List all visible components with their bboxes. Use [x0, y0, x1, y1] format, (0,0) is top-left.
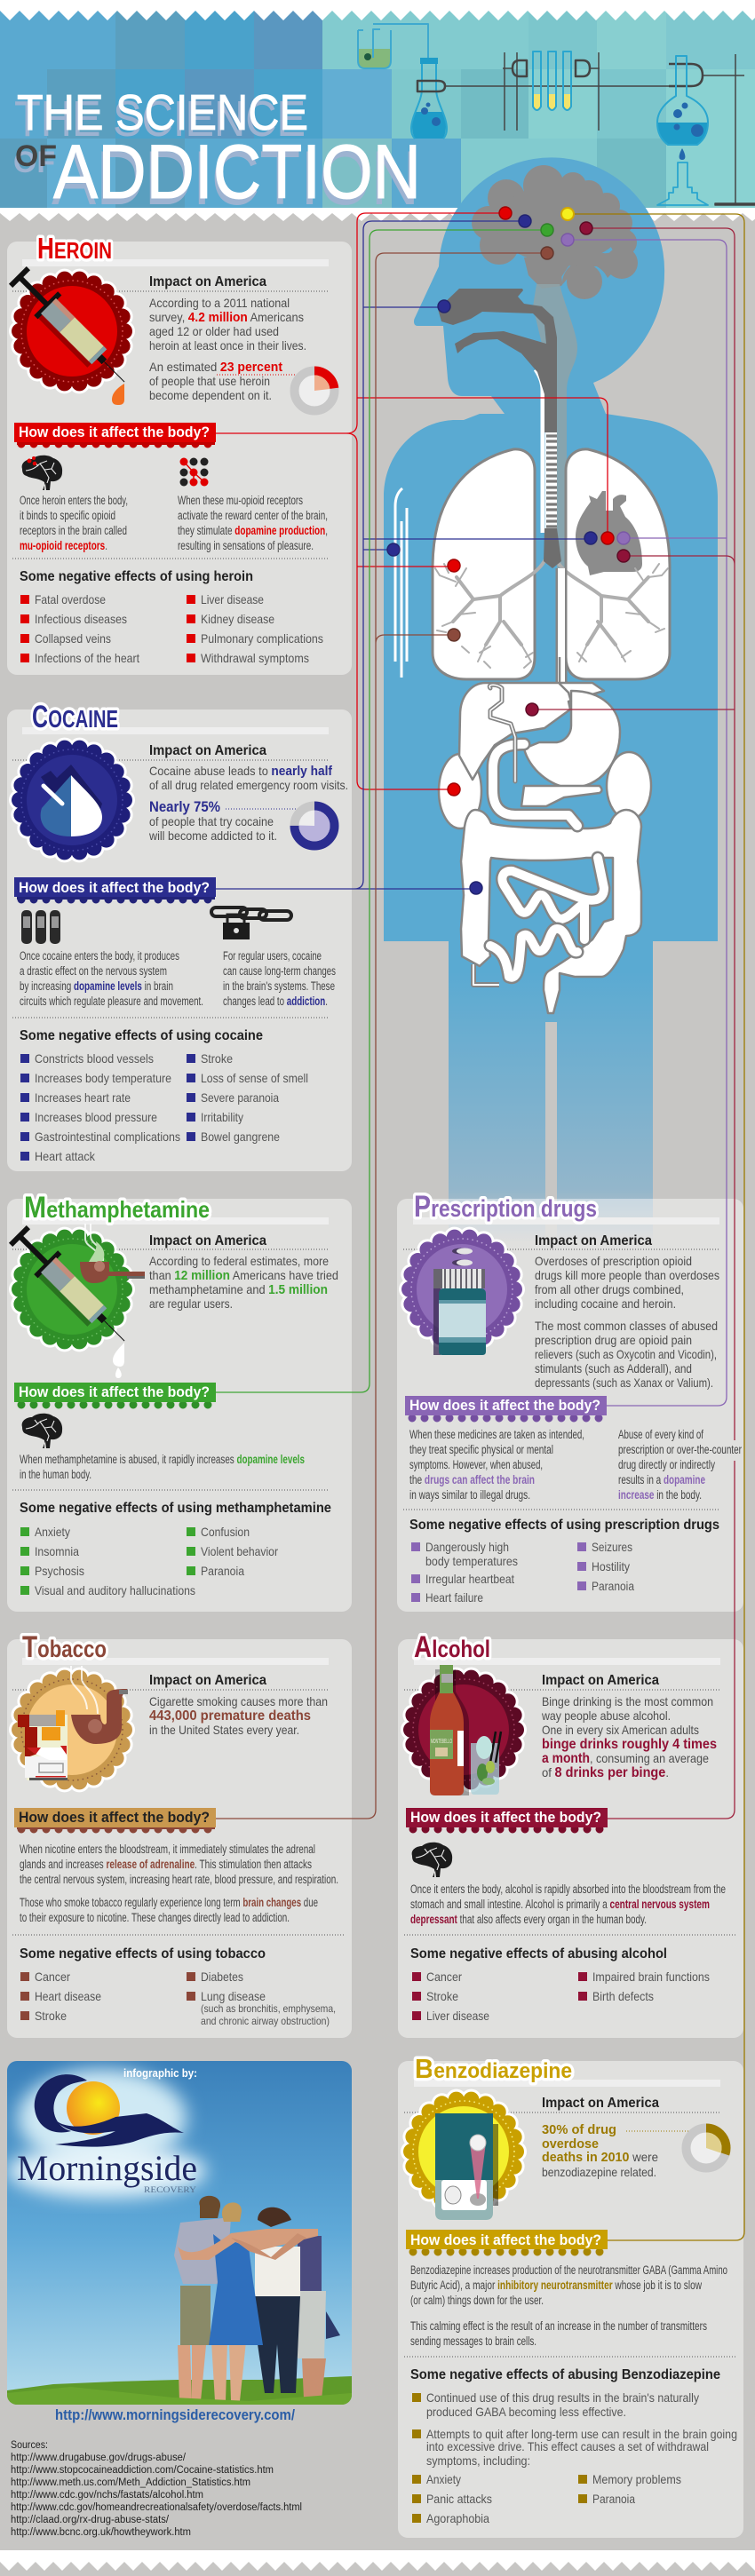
body explanation text: changes lead to addiction. — [223, 995, 328, 1008]
negative effects list: Heart disease — [35, 1989, 101, 2003]
impact text: One in every six American adults — [542, 1723, 699, 1737]
body explanation text: Abuse of every kind of — [618, 1428, 703, 1441]
impact text: heroin at least once in their lives. — [149, 338, 306, 353]
connector: benzodiazepine — [568, 214, 744, 2240]
icon: prescription badge — [409, 1236, 515, 1355]
tab: how does it affect the body: How does it affect the body? — [19, 424, 210, 440]
heading: impact on america: Impact on America — [149, 274, 266, 289]
icon: tobacco badge — [18, 1666, 128, 1783]
negative effects list: Visual and auditory hallucinations — [35, 1583, 195, 1597]
negative effects list — [20, 1028, 308, 1163]
negative effects list: Heart attack — [35, 1149, 96, 1163]
negative effects list: body temperatures — [425, 1554, 518, 1568]
body explanation text: increase in the body. — [618, 1488, 702, 1502]
body explanation text: When nicotine enters the bloodstream, it immediately stimulates the adrenal — [20, 1843, 315, 1856]
negative effects list: Some negative effects of abusing alcohol — [410, 1946, 667, 1962]
title: OF — [13, 146, 55, 179]
body explanation text: sending messages to brain cells. — [410, 2334, 536, 2348]
body explanation text: Butyric Acid), a major inhibitory neurotransmitter whose job it is to slow — [410, 2279, 702, 2292]
connector: heroin — [216, 213, 608, 789]
panel: tobacco — [7, 1630, 352, 2038]
body explanation text: the central nervous system, increasing heart rate, blood pressure, and respiration. — [20, 1873, 338, 1886]
body explanation text: depressant that also affects every organ in the human body. — [410, 1913, 647, 1926]
impact text: Binge drinking is the most common — [542, 1694, 713, 1708]
impact text: 443,000 premature deaths — [149, 1708, 311, 1724]
negative effects list: Birth defects — [592, 1989, 654, 2003]
impact text — [149, 1694, 328, 1737]
body explanation text — [410, 2263, 727, 2348]
impact text: The most common classes of abused — [535, 1319, 718, 1333]
impact text: will become addicted to it. — [148, 828, 277, 843]
heading: impact on america: Impact on America — [535, 1233, 652, 1248]
negative effects list: Withdrawal symptoms — [201, 651, 309, 665]
negative effects list: Stroke — [201, 1051, 233, 1066]
body explanation text: When methamphetamine is abused, it rapidly increases dopamine levels — [20, 1453, 305, 1466]
body silhouette — [384, 157, 718, 1243]
negative effects list: Severe paranoia — [201, 1090, 279, 1105]
heading: impact on america: Impact on America — [149, 743, 266, 758]
panel: cocaine — [7, 700, 352, 1171]
icon: flask left — [411, 58, 447, 139]
body marker dots — [387, 207, 630, 894]
impact text: than 12 million Americans have tried — [149, 1268, 338, 1283]
abdominal organs — [439, 657, 651, 1013]
lab equipment illustration — [358, 24, 755, 205]
negative effects list: Some negative effects of using prescription drugs — [409, 1518, 719, 1533]
bronchi — [435, 543, 668, 668]
body explanation text — [20, 1453, 305, 1481]
icon: brain with receptors — [22, 456, 62, 490]
impact text — [149, 296, 306, 402]
human body diagram — [384, 157, 718, 1243]
lung airway join — [544, 528, 561, 568]
negative effects list: Infectious diseases — [35, 612, 127, 626]
negative effects list: Some negative effects of using tobacco — [20, 1946, 266, 1962]
sources list: http://www.cdc.gov/nchs/fastats/alcohol.htm — [11, 2490, 203, 2501]
impact text — [148, 764, 348, 843]
impact text: benzodiazepine related. — [542, 2165, 656, 2179]
title: THE SCIENCE — [14, 91, 306, 147]
negative effects list: Some negative effects of using methamphetamine — [20, 1501, 331, 1516]
impact text: relievers (such as Oxycotin and Vicodin), — [535, 1347, 717, 1361]
negative effects list: Seizures — [592, 1540, 632, 1554]
impact text: According to a 2011 national — [149, 296, 290, 310]
heading: impact on america: Impact on America — [149, 1233, 266, 1248]
negative effects list: Gastrointestinal complications — [35, 1129, 180, 1144]
negative effects list: Diabetes — [201, 1970, 243, 1984]
negative effects list: Anxiety — [426, 2472, 461, 2486]
icon: receptor dots — [179, 458, 208, 487]
grass — [7, 2376, 352, 2405]
brain — [472, 165, 638, 299]
body explanation text — [20, 949, 336, 1008]
connector: cocaine — [216, 221, 591, 889]
negative effects list: Liver disease — [426, 2009, 489, 2023]
negative effects list: Panic attacks — [426, 2492, 492, 2506]
title: OF — [15, 139, 57, 173]
sources list: http://claad.org/rx-drug-abuse-stats/ — [11, 2515, 170, 2525]
chart: 75 percent donut — [226, 806, 334, 845]
connector: methamphetamine — [216, 230, 547, 1392]
impact text: 30% of drug — [542, 2122, 616, 2137]
impact text: An estimated 23 percent — [149, 360, 282, 375]
panel: prescription drugs — [397, 1190, 743, 1612]
sources list: http://www.bcnc.org.uk/howtheywork.htm — [11, 2527, 191, 2538]
icon: beaker — [358, 24, 428, 68]
bottom edge — [0, 2550, 755, 2571]
body explanation text: For regular users, cocaine — [223, 949, 322, 963]
icon: heroin badge — [5, 263, 137, 405]
impact text: of people that try cocaine — [149, 814, 274, 828]
connector: prescription drugs — [568, 240, 727, 1406]
logo: morningside recovery: RECOVERY — [144, 2186, 196, 2195]
negative effects list — [409, 1518, 719, 1605]
tab: how does it affect the body: How does it affect the body? — [409, 1397, 600, 1414]
negative effects list: (such as bronchitis, emphysema, — [201, 2002, 336, 2015]
impact text: Overdoses of prescription opioid — [535, 1254, 692, 1268]
markers: alcohol — [526, 222, 630, 716]
body explanation text: by increasing dopamine levels in brain — [20, 979, 173, 993]
heading: prescription drugs: Prescription drugs — [414, 1190, 597, 1224]
icon: alcohol badge — [410, 1665, 517, 1795]
sources list: http://www.cdc.gov/homeandrecreationalsafety/overdose/facts.html — [11, 2502, 302, 2513]
negative effects list: Pulmonary complications — [201, 631, 323, 646]
impact text: Cigarette smoking causes more than — [149, 1694, 328, 1708]
duodenum and intestines — [489, 685, 604, 978]
markers: heroin — [448, 207, 614, 796]
marker: benzodiazepine — [561, 208, 574, 220]
tab: how does it affect the body: How does it affect the body? — [410, 2231, 601, 2248]
negative effects list: into excessive drive. This effect causes a set of withdrawal — [426, 2439, 709, 2453]
negative effects list: Some negative effects of using cocaine — [20, 1028, 263, 1043]
body explanation text: mu-opioid receptors. — [20, 539, 107, 552]
airway — [438, 289, 557, 432]
body explanation text: stomach and small intestine. Alcohol is primarily a central nervous system — [410, 1898, 710, 1911]
icon: benzodiazepine badge — [410, 2098, 517, 2220]
body explanation text: can cause long-term changes — [223, 964, 336, 978]
heading: impact on america: Impact on America — [149, 1673, 266, 1688]
connector: tobacco — [216, 253, 547, 1819]
negative effects list: Cancer — [35, 1970, 70, 1984]
impact text: including cocaine and heroin. — [535, 1296, 676, 1311]
body explanation text — [410, 1882, 726, 1926]
icon: stand and clamps — [417, 52, 755, 205]
logo: morningside recovery — [17, 2074, 197, 2195]
impact text: way people abuse alcohol. — [541, 1708, 671, 1723]
negative effects list — [20, 1501, 331, 1597]
negative effects list: produced GABA becoming less effective. — [426, 2405, 626, 2419]
negative effects list: Hostility — [592, 1559, 630, 1573]
negative effects list: Memory problems — [592, 2472, 681, 2486]
impact text: drugs kill more people than overdoses — [535, 1268, 719, 1282]
negative effects list: Impaired brain functions — [592, 1970, 710, 1984]
heading: tobacco: Tobacco — [22, 1630, 107, 1664]
body explanation text — [20, 494, 328, 552]
esophagus lower — [561, 568, 573, 694]
body explanation text: results in a dopamine — [618, 1473, 705, 1486]
body explanation text — [409, 1428, 742, 1502]
negative effects list: Kidney disease — [201, 612, 274, 626]
heading: impact on america: Impact on America — [542, 1673, 659, 1688]
negative effects list: Lung disease — [201, 1989, 266, 2003]
impact text: survey, 4.2 million Americans — [149, 310, 304, 325]
negative effects list: Violent behavior — [201, 1544, 278, 1558]
negative effects list: Stroke — [426, 1989, 458, 2003]
heading: heroin: HEROIN — [37, 232, 112, 265]
negative effects list: Irregular heartbeat — [425, 1572, 514, 1586]
panel: heroin — [5, 232, 352, 675]
body explanation text: Those who smoke tobacco regularly experience long term brain changes due — [20, 1896, 318, 1909]
body explanation text: in the human body. — [20, 1468, 91, 1481]
icon: meth badge — [5, 1222, 145, 1378]
body explanation text: to their exposure to nicotine. These changes directly lead to addiction. — [20, 1911, 290, 1924]
icon: brain — [412, 1843, 452, 1877]
icon: alcohol badge: MONTEBELLO — [431, 1739, 452, 1745]
impact text: of people that use heroin — [149, 374, 270, 388]
icon: chain and padlock — [211, 908, 291, 939]
negative effects list: Heart failure — [425, 1590, 483, 1605]
negative effects list: Fatal overdose — [35, 592, 106, 606]
heading: cocaine: COCAINE — [32, 700, 118, 734]
esophagus stripe — [536, 369, 543, 533]
tab: how does it affect the body: How does it affect the body? — [19, 1383, 210, 1400]
body explanation text: glands and increases release of adrenaline. This stimulation then attacks — [20, 1858, 312, 1871]
negative effects list: Increases body temperature — [35, 1071, 171, 1085]
impact text: methamphetamine and 1.5 million — [149, 1282, 328, 1297]
body explanation text: symptoms. However, when abused, — [409, 1458, 543, 1471]
heading: alcohol: Alcohol — [414, 1630, 490, 1664]
markers: methamphetamine — [541, 224, 553, 236]
impact text: deaths in 2010 were — [542, 2150, 658, 2165]
markers: tobacco — [448, 247, 553, 641]
impact text: of 8 drinks per binge. — [542, 1765, 669, 1780]
heading: benzodiazepine: Benzodiazepine — [415, 2053, 572, 2084]
connector lines — [216, 213, 744, 2240]
sources list — [11, 2440, 302, 2538]
tab: how does it affect the body: How does it affect the body? — [19, 879, 210, 896]
negative effects list: Insomnia — [35, 1544, 79, 1558]
impact text: become dependent on it. — [149, 388, 272, 402]
impact text — [535, 1254, 719, 1390]
body explanation text: they treat specific physical or mental — [409, 1443, 553, 1456]
negative effects list: Dangerously high — [425, 1540, 509, 1554]
title: THE SCIENCE — [17, 84, 308, 141]
icon: test tubes — [21, 910, 60, 944]
panel: morningside photo — [7, 2061, 352, 2405]
body explanation text: drug directly or indirectly — [618, 1458, 715, 1471]
chart: 23 percent donut — [217, 371, 334, 410]
negative effects list: Confusion — [201, 1525, 250, 1539]
tab: how does it affect the body: How does it affect the body? — [19, 1809, 210, 1826]
panel: benzodiazepine — [398, 2053, 743, 2538]
impact text: of all drug related emergency room visits. — [149, 778, 348, 792]
impact text: According to federal estimates, more — [149, 1254, 329, 1268]
body explanation text: (or calm) things down for the user. — [410, 2294, 544, 2307]
negative effects list — [410, 2367, 737, 2525]
impact text: a month, consuming an average — [542, 1751, 709, 1766]
negative effects list: Increases blood pressure — [35, 1110, 157, 1124]
markers: prescription drugs — [561, 234, 630, 544]
body explanation text: When these medicines are taken as intended, — [409, 1428, 584, 1441]
impact text — [149, 1254, 338, 1311]
body explanation text: Once heroin enters the body, — [20, 494, 128, 507]
negative effects list: Irritability — [201, 1110, 243, 1124]
body explanation text: it binds to specific opioid — [20, 509, 115, 522]
impact text: Nearly 75% — [149, 799, 220, 815]
negative effects list: Loss of sense of smell — [201, 1071, 308, 1085]
negative effects list: Constricts blood vessels — [35, 1051, 154, 1066]
negative effects list: Psychosis — [35, 1564, 84, 1578]
sources list: Sources: — [11, 2440, 48, 2451]
spinal cord — [533, 284, 577, 586]
negative effects list: Some negative effects of using heroin — [20, 569, 253, 584]
negative effects list: Liver disease — [201, 592, 264, 606]
impact text — [542, 2122, 658, 2179]
panel: alcohol — [398, 1630, 743, 2038]
panel: methamphetamine — [5, 1191, 352, 1612]
body explanation text: receptors in the brain called — [20, 524, 127, 537]
negative effects list: and chronic airway obstruction) — [201, 2015, 330, 2027]
body explanation text: the drugs can affect the brain — [409, 1473, 535, 1486]
website url: http://www.morningsiderecovery.com/ — [55, 2407, 295, 2423]
chart: 30 percent donut — [626, 2128, 727, 2168]
header banner — [0, 0, 755, 221]
negative effects list: Cancer — [426, 1970, 462, 1984]
heart — [576, 491, 642, 575]
body explanation text: When these mu-opioid receptors — [178, 494, 303, 507]
icon: round flask and burner — [657, 56, 708, 205]
impact text: depressants (such as Xanax or Valium). — [535, 1375, 713, 1390]
title: ADDICTION — [52, 136, 419, 221]
arm vessels — [395, 488, 407, 678]
negative effects list: Infections of the heart — [35, 651, 139, 665]
impact text: aged 12 or older had used — [149, 324, 279, 338]
body explanation text: Once cocaine enters the body, it produces — [20, 949, 179, 963]
negative effects list: Agoraphobia — [426, 2511, 489, 2525]
negative effects list: Paranoia — [592, 2492, 635, 2506]
negative effects list: Increases heart rate — [35, 1090, 131, 1105]
impact text: stimulants (such as Adderall), and — [535, 1361, 692, 1375]
body explanation text: resulting in sensations of pleasure. — [178, 539, 314, 552]
markers: cocaine — [387, 215, 597, 894]
heading: methamphetamine: Methamphetamine — [24, 1191, 210, 1225]
impact text: overdose — [542, 2136, 599, 2152]
title: ADDICTION — [53, 130, 421, 215]
negative effects list: Some negative effects of abusing Benzodiazepine — [410, 2367, 720, 2382]
negative effects list: Paranoia — [201, 1564, 244, 1578]
infographic by: infographic by: — [123, 2067, 197, 2080]
trachea — [544, 432, 557, 548]
icon: cocaine badge — [19, 747, 125, 853]
body explanation text: they stimulate dopamine production, — [178, 524, 328, 537]
impact text: from all other drugs combined, — [535, 1282, 684, 1296]
icon: brain — [22, 1414, 62, 1448]
photo: group of people — [174, 2196, 340, 2401]
sources list: http://www.stopcocaineaddiction.com/Cocaine-statistics.htm — [11, 2465, 274, 2476]
impact text: prescription drug are opioid pain — [535, 1333, 692, 1347]
logo: morningside recovery: Morningside — [17, 2148, 197, 2188]
body explanation text: activate the reward center of the brain, — [178, 509, 328, 522]
sources list: http://www.meth.us.com/Meth_Addiction_Statistics.htm — [11, 2477, 250, 2488]
impact text: are regular users. — [149, 1296, 233, 1311]
body explanation text: circuits which regulate pleasure and movement. — [20, 995, 203, 1008]
body explanation text: in the brain's systems. These — [223, 979, 335, 993]
impact text: Cocaine abuse leads to nearly half — [149, 764, 333, 779]
impact text: in the United States every year. — [149, 1723, 299, 1737]
negative effects list: symptoms, including: — [426, 2453, 530, 2468]
negative effects list: Paranoia — [592, 1579, 634, 1593]
negative effects list: Continued use of this drug results in the brain's naturally — [426, 2390, 699, 2405]
body explanation text — [20, 1843, 338, 1924]
icon: test tubes — [533, 52, 571, 110]
negative effects list — [20, 569, 323, 665]
body explanation text: a drastic effect on the nervous system — [20, 964, 167, 978]
connector: alcohol — [532, 228, 735, 1819]
lungs — [433, 449, 670, 679]
negative effects list: Bowel gangrene — [201, 1129, 280, 1144]
negative effects list: Anxiety — [35, 1525, 70, 1539]
negative effects list: Collapsed veins — [35, 631, 111, 646]
impact text: binge drinks roughly 4 times — [542, 1737, 717, 1752]
sources list: http://www.drugabuse.gov/drugs-abuse/ — [11, 2453, 187, 2463]
impact text — [541, 1694, 717, 1780]
heading: impact on america: Impact on America — [542, 2096, 659, 2111]
title — [13, 84, 421, 221]
body explanation text: in ways similar to illegal drugs. — [409, 1488, 530, 1502]
negative effects list: Stroke — [35, 2009, 67, 2023]
negative effects list — [20, 1946, 336, 2027]
tab: how does it affect the body: How does it affect the body? — [410, 1809, 601, 1826]
negative effects list — [410, 1946, 710, 2023]
